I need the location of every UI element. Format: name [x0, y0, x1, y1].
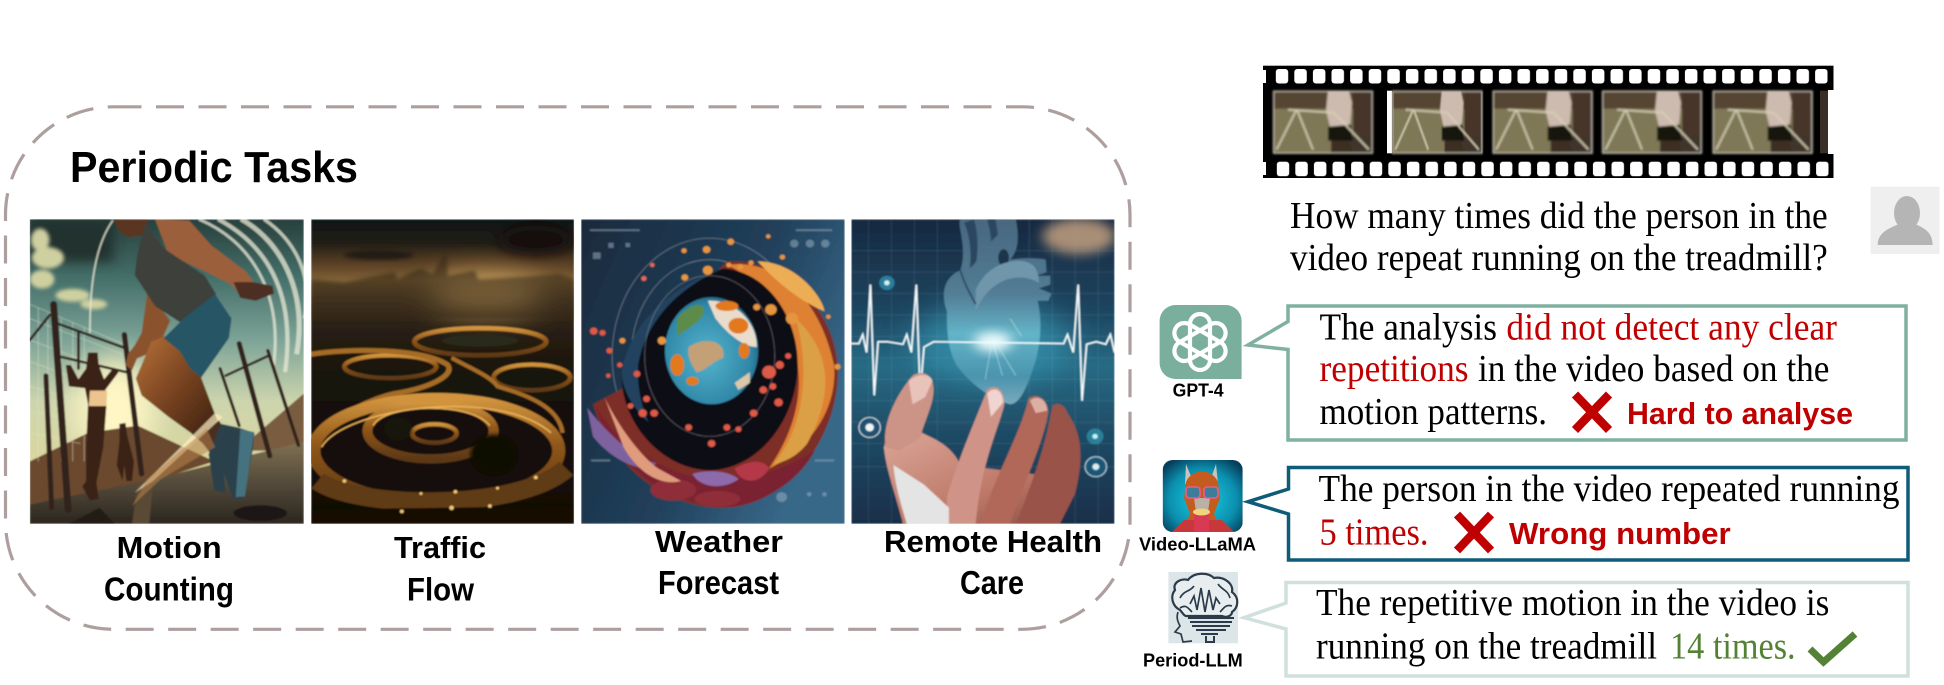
label: remote health care: Remote Health: [884, 524, 1102, 559]
icon: red cross: [1575, 394, 1609, 430]
callout: Video-LLaMA response: The person in the video repeated running: [1318, 468, 1900, 510]
heart: [944, 219, 1051, 404]
heading: periodic tasks: Periodic Tasks: [70, 143, 358, 192]
icon: red cross: [1457, 514, 1491, 550]
icon: user avatar: [1871, 187, 1940, 254]
label: remote health care: Care: [960, 564, 1024, 601]
icon: GPT-4 logo: [1160, 305, 1242, 379]
callout: GPT-4 response: [1248, 306, 1906, 440]
verdict: hard to analyse: Hard to analyse: [1627, 396, 1853, 431]
dashed rounded border: [6, 107, 1130, 629]
callout: GPT-4 response: motion patterns.: [1320, 391, 1547, 433]
callout: GPT-4 response: did not detect any clear: [1506, 306, 1837, 348]
callout: Video-LLaMA response: 5 times.: [1320, 511, 1428, 553]
label: motion counting: Counting: [104, 571, 234, 608]
image: motion counting: [30, 219, 307, 524]
panel: periodic tasks: [6, 107, 1130, 629]
callout: GPT-4 response: in the video based on the: [1478, 348, 1829, 390]
label: weather forecast: Weather: [655, 524, 783, 559]
verdict: wrong number: Wrong number: [1509, 516, 1731, 551]
label: motion counting: Motion: [117, 530, 222, 565]
label: motion counting: [104, 530, 234, 608]
video frames: [1273, 91, 1828, 154]
label: traffic flow: Traffic: [394, 530, 486, 565]
icon: Period-LLM logo: [1168, 572, 1238, 643]
callout: GPT-4 response: repetitions: [1320, 348, 1468, 390]
image: traffic flow: [311, 219, 574, 524]
label: remote health care: [884, 524, 1102, 601]
label: weather forecast: [655, 524, 783, 601]
image: weather forecast: [581, 219, 845, 524]
callout: GPT-4 response: The analysis: [1320, 306, 1497, 348]
label: traffic flow: [394, 530, 486, 608]
icon: green check mark: [1810, 634, 1855, 662]
callout: Period-LLM response: running on the treadmill: [1316, 625, 1657, 667]
question text: [1290, 195, 1828, 279]
film strip: [1263, 66, 1834, 178]
woman: [66, 352, 119, 501]
question text: video repeat running on the treadmill?: [1290, 237, 1828, 279]
label: Period-LLM: Period-LLM: [1143, 651, 1243, 671]
runner: [114, 219, 148, 237]
icon: Video-LLaMA logo: [1163, 460, 1243, 532]
callout: Period-LLM response: [1244, 582, 1908, 676]
callout: Video-LLaMA response: [1248, 468, 1908, 560]
label: GPT-4: GPT-4: [1173, 381, 1224, 401]
question text: How many times did the person in the: [1290, 195, 1828, 237]
label: weather forecast: Forecast: [658, 564, 779, 601]
label: traffic flow: Flow: [407, 572, 474, 608]
callout: Period-LLM response: The repetitive motion in the video is: [1316, 582, 1829, 624]
distant runner: [117, 423, 134, 481]
hand: [882, 432, 1035, 524]
ECG line: [851, 285, 1115, 401]
callout: Period-LLM response: 14 times.: [1670, 625, 1796, 667]
label: Video-LLaMA: Video-LLaMA: [1139, 535, 1256, 555]
image: remote health care: [851, 219, 1115, 524]
